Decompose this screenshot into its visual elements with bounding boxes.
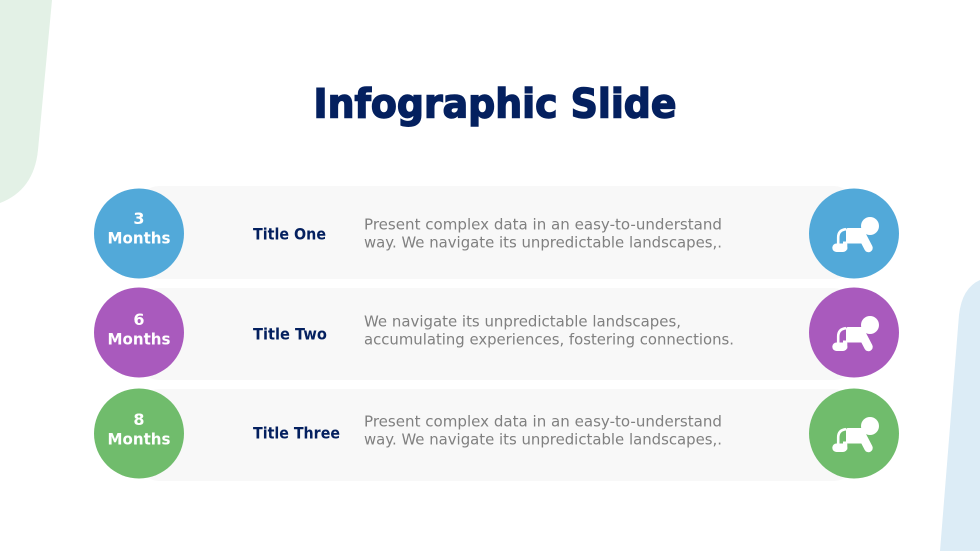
row 2 description [364,312,734,348]
row 2 age badge: 6 [133,310,145,329]
row 2 heading: Title Two [253,324,327,344]
row 1 description: way. We navigate its unpredictable landscapes,. [364,234,722,252]
row 3 description [364,412,722,448]
row 1 baby icon badge [809,188,899,278]
row 2 background bar [139,288,854,380]
row 1 description: Present complex data in an easy-to-understand [364,216,722,234]
row 2 age badge: Months [108,330,170,348]
row 2 description: We navigate its unpredictable landscapes, [364,312,681,330]
row 3 age badge: 8 [133,410,145,429]
row 1 background bar [139,186,854,279]
row 2 age badge [94,288,184,378]
row 1 heading: Title One [253,224,326,244]
row 3 age badge [94,388,184,478]
decorative shape: green top-left [0,0,52,203]
row 3 description: Present complex data in an easy-to-understand [364,412,722,430]
row 2 baby icon badge [809,288,899,378]
row 2 [94,288,899,380]
decorative shape: blue bottom-right [940,280,980,551]
row 1 age badge: Months [108,228,170,248]
row 3 description: way. We navigate its unpredictable landscapes,. [364,430,722,448]
row 3 background bar [139,389,854,481]
row 1 [94,186,899,279]
title: Infographic Slide [314,82,676,128]
row 3 heading: Title Three [253,424,340,442]
row 1 description [364,216,722,252]
row 1 age badge [94,188,184,278]
row 1 age badge: 3 [133,209,145,228]
row 3 [94,388,899,481]
row 3 age badge: Months [108,430,170,448]
row 3 baby icon badge [809,388,899,478]
row 2 description: accumulating experiences, fostering connections. [364,330,734,348]
